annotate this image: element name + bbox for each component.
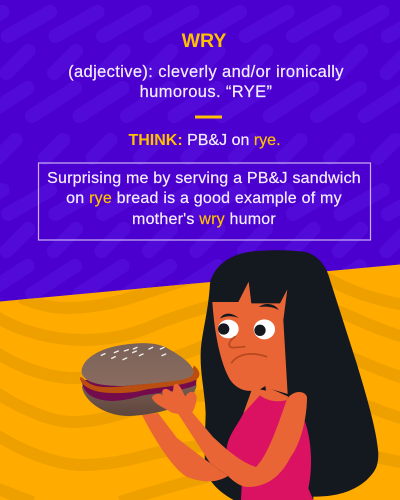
chin shadow [260, 386, 266, 391]
hair [201, 250, 378, 500]
definition: humorous. “RYE” [140, 82, 272, 100]
back arm [142, 413, 228, 481]
definition [68, 63, 344, 100]
right brow [259, 304, 279, 310]
pink dress [227, 395, 313, 500]
left eye [218, 320, 239, 338]
hand [152, 384, 197, 417]
example sentence: on rye bread is a good example of my [66, 190, 342, 207]
jam [82, 377, 197, 401]
bottom bun [82, 377, 197, 416]
face [212, 282, 288, 394]
title: WRY [182, 30, 226, 52]
example sentence [47, 170, 361, 228]
sesame seeds [101, 347, 166, 360]
front arm [177, 392, 307, 487]
divider [195, 116, 222, 118]
left brow [220, 314, 239, 319]
example box [38, 163, 370, 240]
top bun [82, 343, 194, 386]
nose [229, 337, 245, 348]
peanut butter [80, 365, 199, 393]
example sentence: Surprising me by serving a PB&J sandwich [47, 170, 361, 187]
yellow wavy ground [0, 260, 400, 500]
sandwich [80, 343, 199, 417]
think line: THINK: PB&J on rye. [128, 132, 281, 149]
mouth [232, 354, 267, 363]
character: woman [201, 250, 378, 500]
right eye [254, 319, 275, 339]
definition: (adjective): cleverly and/or ironically [68, 63, 344, 81]
neck [243, 387, 288, 413]
example sentence: mother's wry humor [132, 211, 276, 228]
